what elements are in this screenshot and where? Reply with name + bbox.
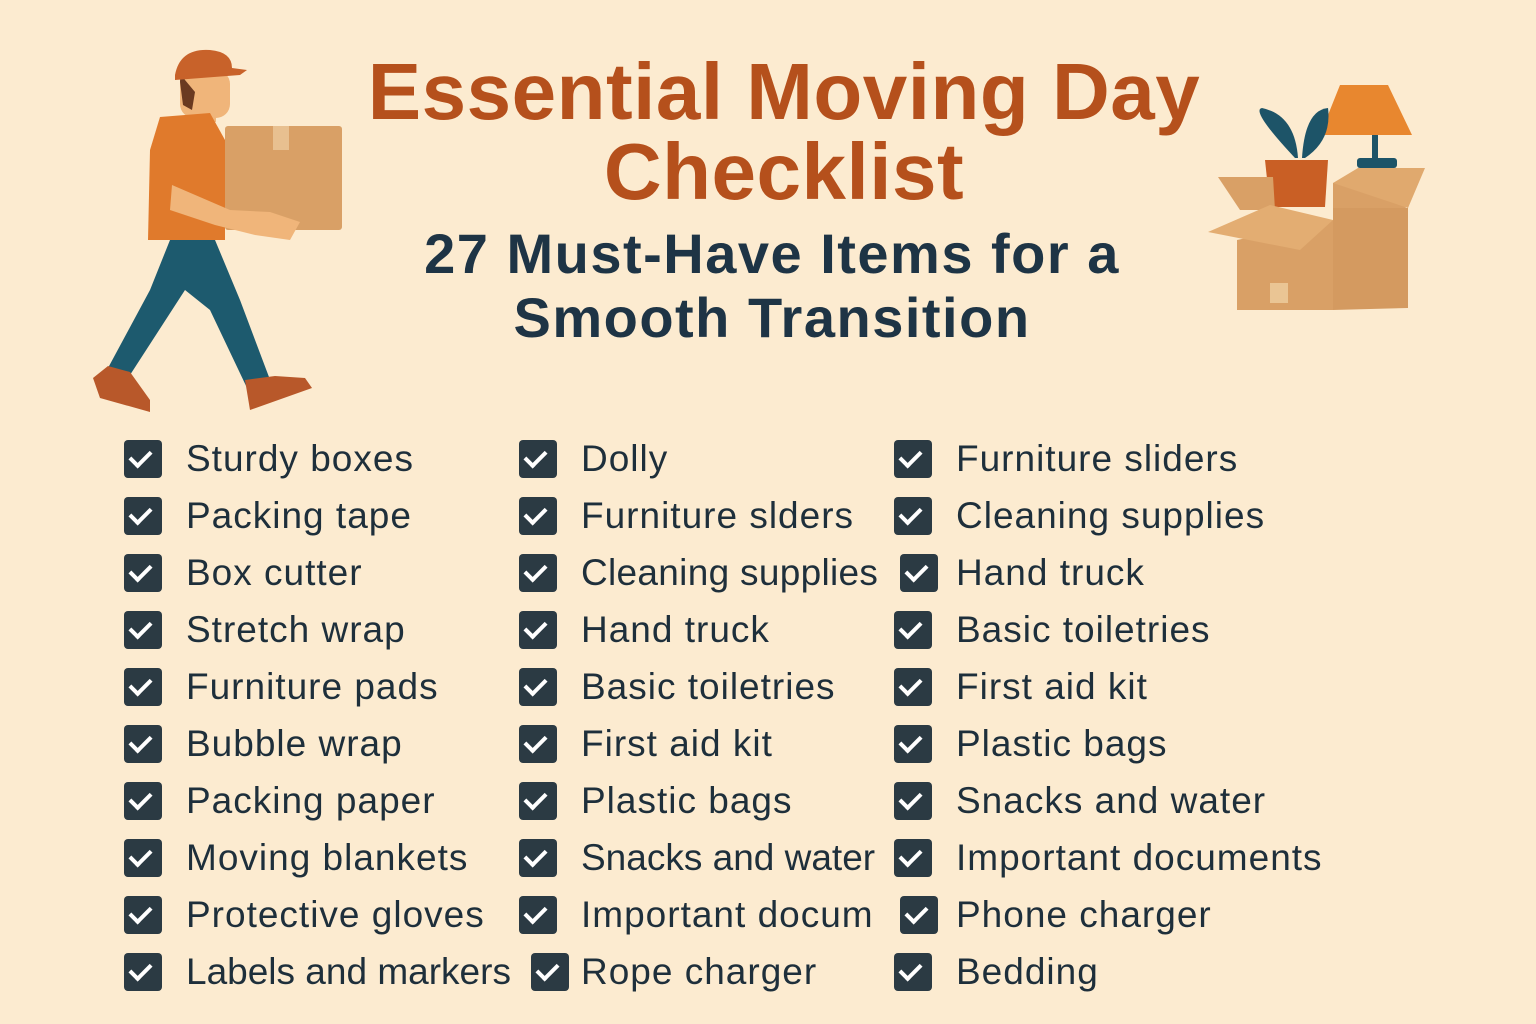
checklist column 1: Packing paper xyxy=(186,780,436,821)
checklist column 2: Snacks and water xyxy=(581,837,875,878)
checklist column 2 xyxy=(519,438,878,992)
checklist column 1: Labels and markers xyxy=(186,951,511,992)
checklist column 2: Plastic bags xyxy=(581,780,792,821)
checklist column 2: Hand truck xyxy=(581,609,770,650)
checklist column 2: Basic toiletries xyxy=(581,666,836,707)
title: Checklist xyxy=(604,127,964,216)
checklist column 3: Snacks and water xyxy=(956,780,1266,821)
checklist column 2: Rope charger xyxy=(581,951,817,992)
checklist column 1: Packing tape xyxy=(186,495,412,536)
checklist column 3: Plastic bags xyxy=(956,723,1168,764)
checklist column 2: Furniture slders xyxy=(581,495,854,536)
illustration: mover carrying box xyxy=(93,50,342,412)
title: Essential Moving Day xyxy=(368,47,1200,136)
checklist column 3: First aid kit xyxy=(956,666,1148,707)
checklist column 3 xyxy=(894,438,1323,992)
subtitle xyxy=(424,222,1120,349)
checklist column 3: Hand truck xyxy=(956,552,1145,593)
checklist column 2: Important docum xyxy=(581,894,874,935)
checklist column 2: First aid kit xyxy=(581,723,773,764)
checklist column 3: Important documents xyxy=(956,837,1323,878)
checklist column 3: Bedding xyxy=(956,951,1099,992)
checklist column 3: Cleaning supplies xyxy=(956,495,1265,536)
checklist column 1: Stretch wrap xyxy=(186,609,406,650)
checklist column 3: Phone charger xyxy=(956,894,1212,935)
checklist column 1 xyxy=(124,438,511,992)
subtitle: 27 Must-Have Items for a xyxy=(424,222,1120,285)
checklist column 1: Protective gloves xyxy=(186,894,485,935)
checklist column 1: Sturdy boxes xyxy=(186,438,414,479)
subtitle: Smooth Transition xyxy=(513,286,1031,349)
checklist column 3: Furniture sliders xyxy=(956,438,1238,479)
checklist column 2: Cleaning supplies xyxy=(581,552,878,593)
checklist column 2: Dolly xyxy=(581,438,668,479)
illustration: open box with plant and lamp xyxy=(1208,85,1425,310)
checklist column 1: Moving blankets xyxy=(186,837,468,878)
checklist column 3: Basic toiletries xyxy=(956,609,1211,650)
checklist column 1: Bubble wrap xyxy=(186,723,403,764)
title xyxy=(368,47,1200,216)
checklist column 1: Furniture pads xyxy=(186,666,439,707)
checklist column 1: Box cutter xyxy=(186,552,363,593)
